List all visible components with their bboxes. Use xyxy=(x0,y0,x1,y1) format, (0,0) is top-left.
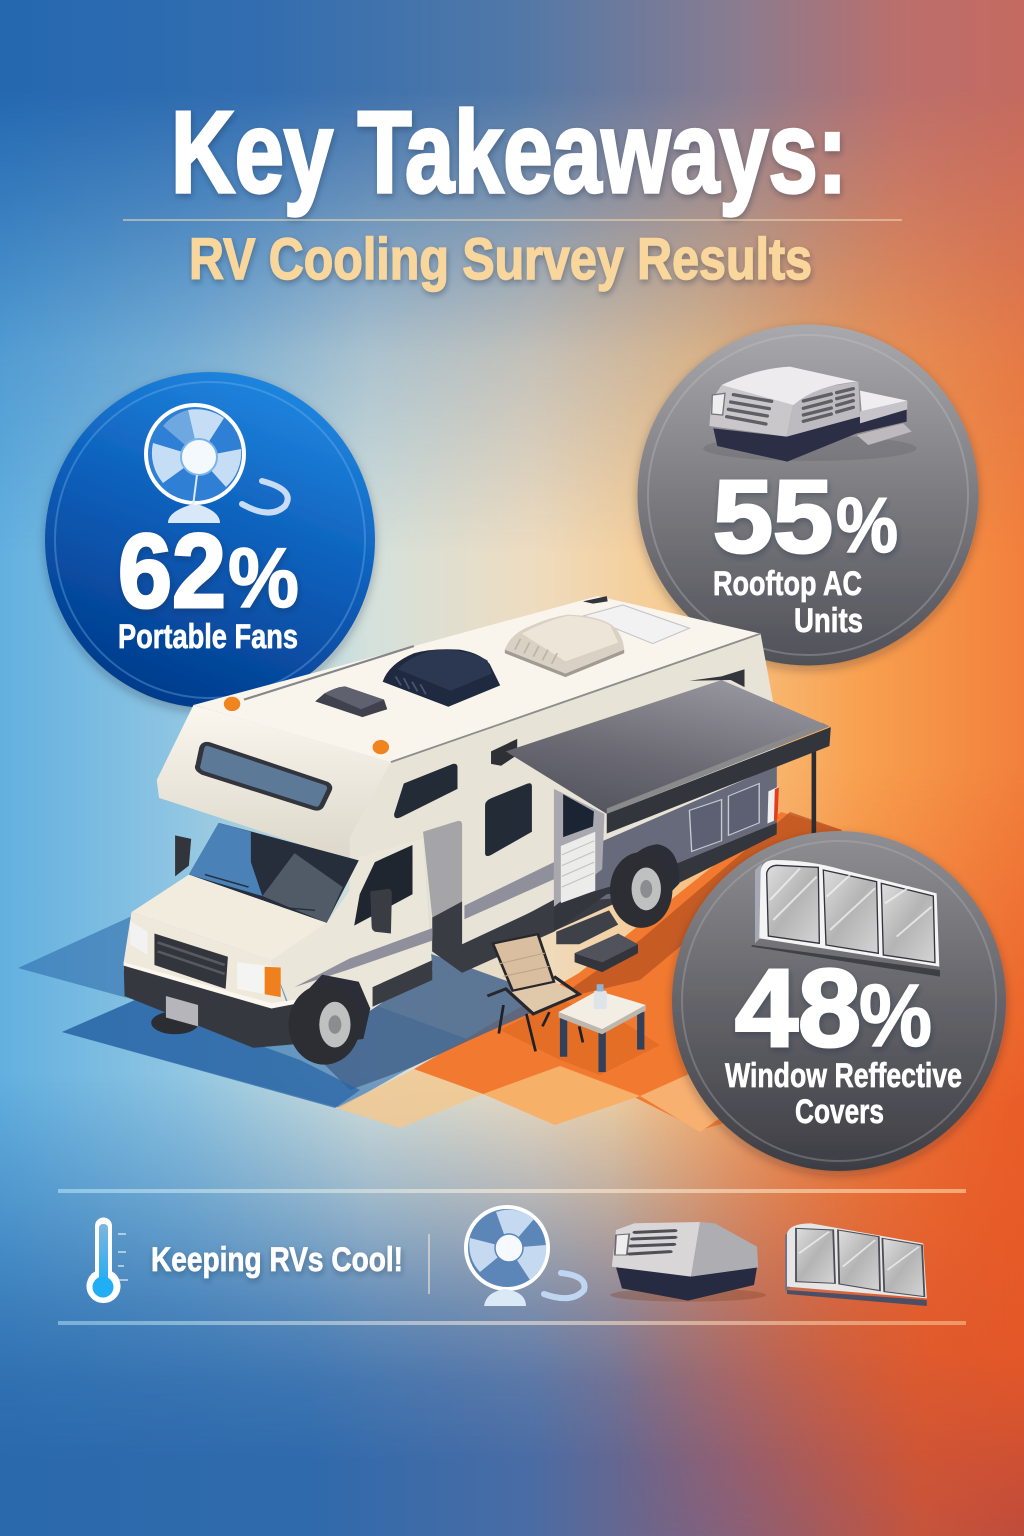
divider xyxy=(428,1234,430,1294)
label: covers: Covers xyxy=(795,1093,884,1131)
stat: 55%: 55 xyxy=(713,459,833,574)
front face xyxy=(124,912,290,1012)
windshield xyxy=(189,823,359,923)
cab side xyxy=(272,838,432,1012)
stat: 55%: % xyxy=(836,481,898,569)
side table with cup xyxy=(559,984,646,1072)
stat: 62%: % xyxy=(228,531,299,625)
stat: 62%: 62 xyxy=(118,513,226,630)
icon: footer AC unit xyxy=(610,1222,766,1302)
storage doors xyxy=(689,784,759,851)
title divider rule xyxy=(123,219,902,221)
awning xyxy=(491,669,831,834)
roof details xyxy=(224,596,689,754)
side door column xyxy=(423,821,462,917)
icon: footer window xyxy=(785,1223,927,1306)
grille xyxy=(154,934,228,989)
illustration: RV with awning xyxy=(124,596,831,1072)
side wall xyxy=(350,634,777,948)
side stripe xyxy=(464,862,554,919)
cab-over window xyxy=(197,744,330,809)
door window xyxy=(354,845,413,926)
roof side trim line xyxy=(391,634,761,762)
far front wheel xyxy=(151,1011,199,1034)
rear wheel xyxy=(610,844,679,928)
entry door xyxy=(554,789,604,907)
icon: reflective window cover xyxy=(752,860,940,977)
exterior mirror xyxy=(175,835,191,876)
panel: window reflective covers stat xyxy=(672,831,1006,1171)
cab-over front xyxy=(157,705,391,860)
stat: 48%: 48 xyxy=(735,947,861,1070)
entry steps xyxy=(556,910,638,972)
camp chair xyxy=(487,934,583,1051)
subtitle: RV Cooling Survey Results xyxy=(189,227,812,292)
panel: rooftop AC stat xyxy=(638,324,978,666)
front wheel xyxy=(289,985,360,1065)
icon: footer fan xyxy=(466,1207,585,1306)
label: rooftop AC: Rooftop AC xyxy=(713,565,862,603)
bumper xyxy=(124,962,308,1048)
rear lower panel xyxy=(554,766,777,903)
wheel arch xyxy=(292,975,370,1046)
panel: portable fans stat xyxy=(45,372,375,708)
side windows xyxy=(394,764,458,818)
roof xyxy=(193,596,761,762)
icon: rooftop AC unit xyxy=(703,367,917,462)
stat: 55% xyxy=(713,459,898,574)
tail light xyxy=(767,786,779,824)
ground shadows xyxy=(18,812,842,1132)
icon: thermometer xyxy=(87,1218,128,1302)
footer text: Keeping RVs Cool! xyxy=(151,1241,403,1279)
stat: 62% xyxy=(118,513,299,630)
lower skirt xyxy=(432,766,777,973)
label: portable fans: Portable Fans xyxy=(118,618,298,656)
door mirror xyxy=(370,889,392,934)
icon: portable fan xyxy=(146,405,288,523)
stat: 48%: % xyxy=(859,966,932,1065)
label: window reflective: Window Reffective xyxy=(725,1057,962,1095)
stat: 48% xyxy=(735,947,932,1070)
headlights xyxy=(130,921,281,997)
label: units: Units xyxy=(794,602,863,640)
footer strip xyxy=(58,1189,966,1325)
hood xyxy=(131,875,327,960)
